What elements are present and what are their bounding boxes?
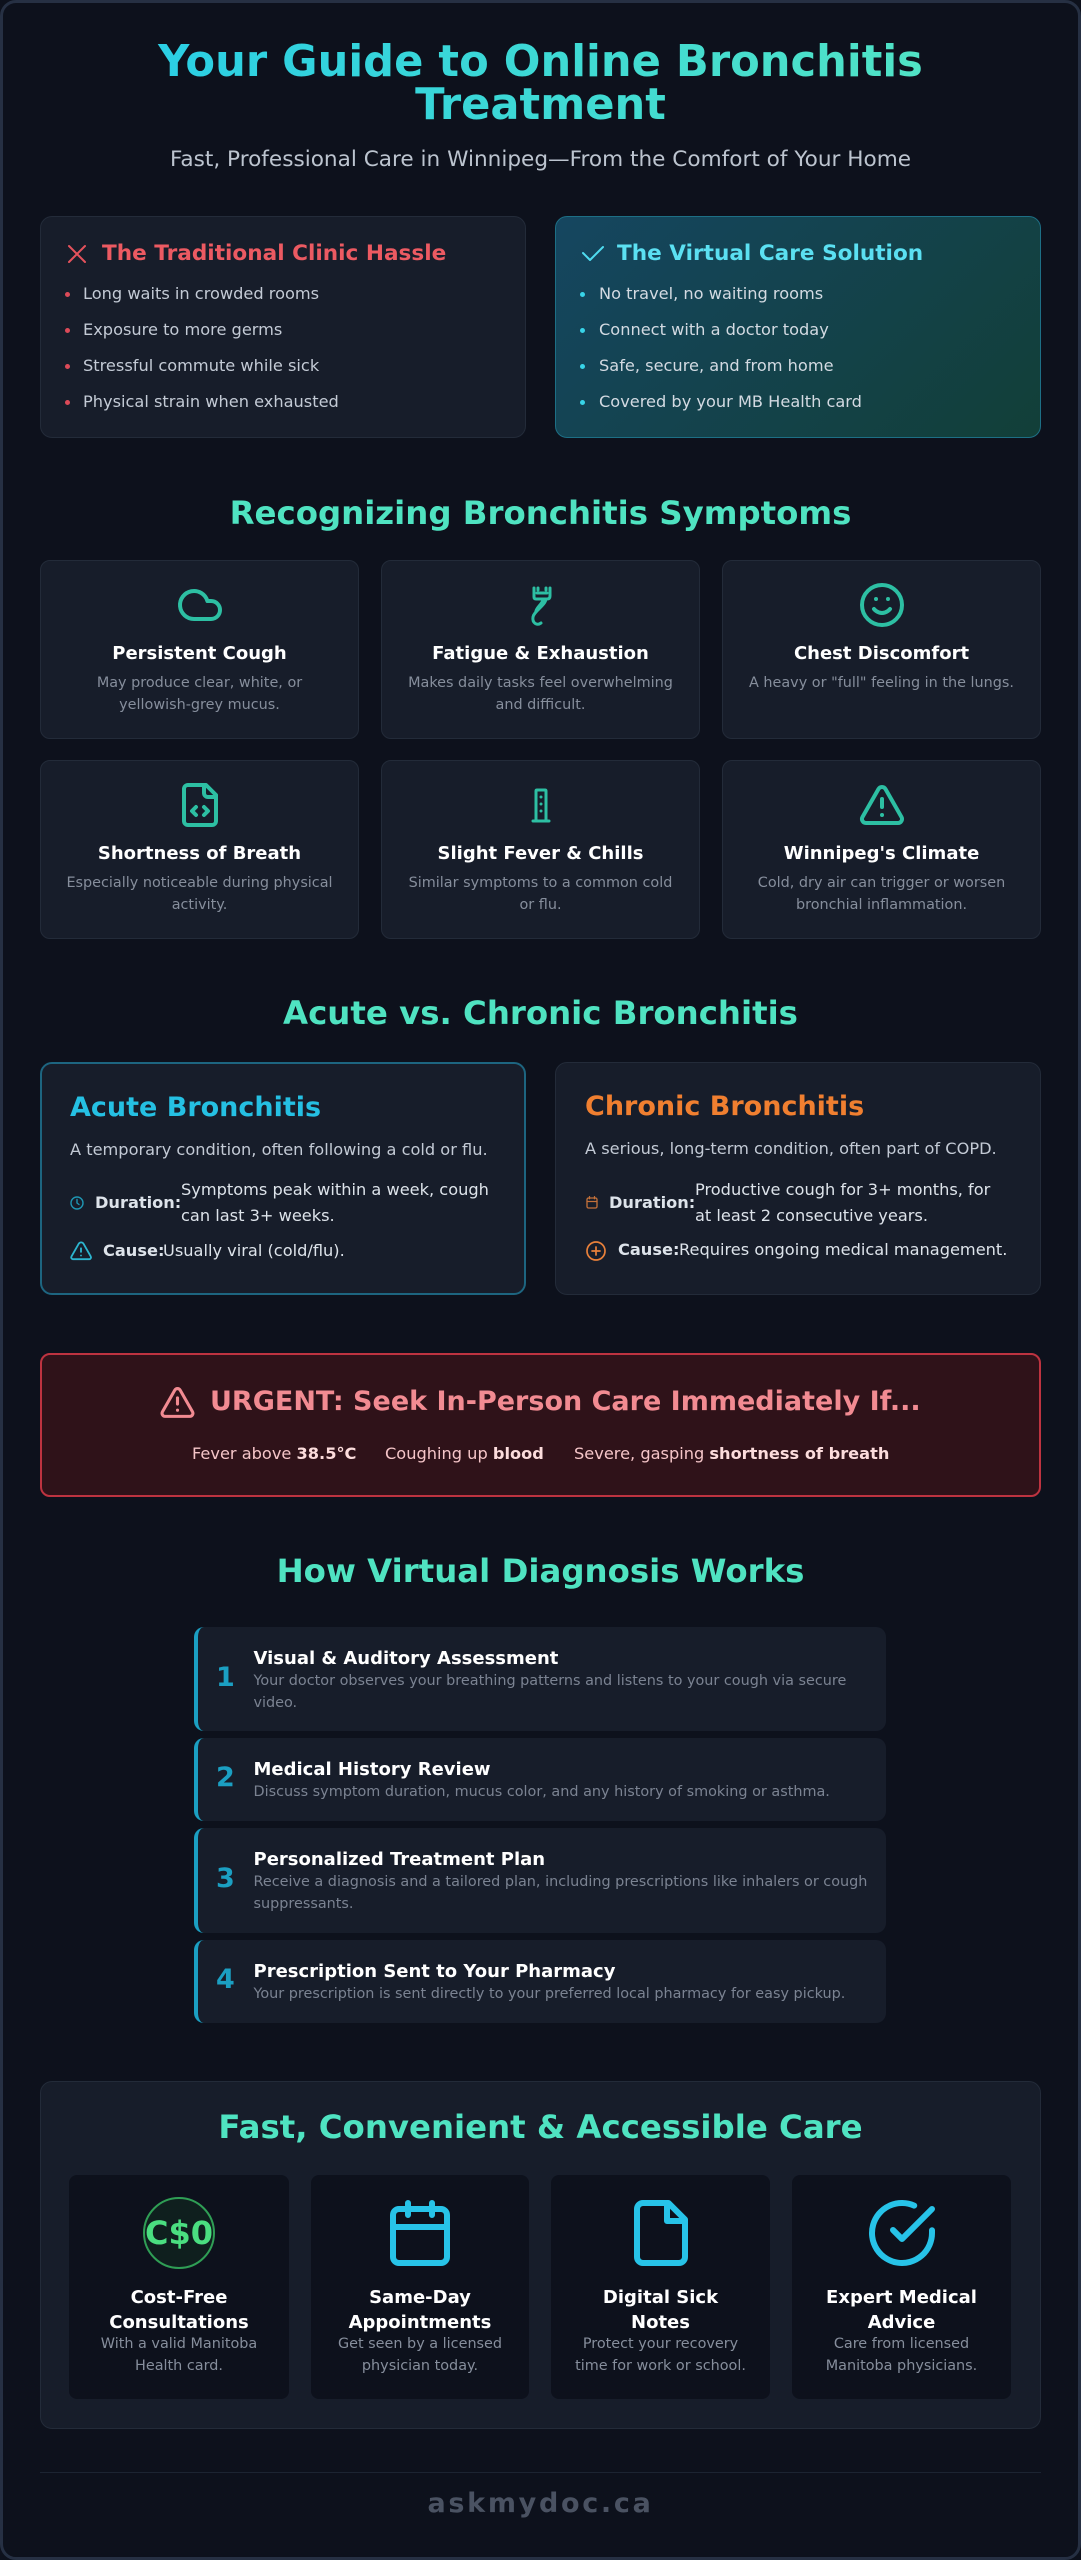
panel: virtual care solution [555,216,1041,438]
card text: Cold, dry air can trigger or worsen [758,875,1005,891]
benefit text: With a valid Manitoba [101,2336,257,2352]
icon: code file [182,783,218,827]
benefit text [101,2336,257,2374]
cause row [70,1241,345,1260]
benefit title: Appointments [349,2312,491,2332]
cause row: Cause: [103,1241,164,1260]
duration row: Duration: [95,1193,181,1212]
step title: Medical History Review [254,1758,491,1780]
urgent items: Severe, gasping shortness of breath [574,1444,889,1463]
duration row: Duration: [609,1193,695,1212]
card text [97,675,302,713]
icon: triangle [70,1242,92,1260]
heading: benefits: Fast, Convenient & Accessible Care [218,2108,863,2146]
card: fever [381,760,700,939]
benefit text [826,2336,977,2374]
card text [408,675,673,713]
benefit title [826,2286,977,2332]
step number: 2 [216,1762,235,1793]
description: A serious, long-term condition, often part of COPD. [585,1139,997,1158]
footer brand: askmydoc.ca [427,2488,654,2519]
card text: or flu. [519,897,562,913]
icon: warning triangle [860,785,904,825]
step number: 1 [216,1662,235,1693]
benefit title [109,2286,249,2332]
step title: Personalized Treatment Plan [254,1848,545,1870]
panel heading: The Virtual Care Solution [617,240,923,266]
card title: Winnipeg's Climate [784,843,979,864]
title: Your Guide to Online Bronchitis [158,36,923,86]
symptom list: Exposure to more germs [83,320,282,339]
card text [758,875,1005,913]
card: persistent cough [40,560,359,739]
duration row: can last 3+ weeks. [181,1206,335,1225]
step title: Visual & Auditory Assessment [254,1648,558,1668]
icon: cloud [178,589,222,621]
benefit text: physician today. [362,2358,478,2374]
heading: symptoms: Recognizing Bronchitis Symptoms [230,494,851,532]
card text: yellowish-grey mucus. [119,697,280,713]
card: chest discomfort [722,560,1041,739]
benefit text [338,2336,502,2374]
benefit title [348,2286,491,2332]
benefit text: Get seen by a licensed [338,2336,502,2352]
icon: C$0 badge: C$0 [145,2214,213,2252]
benefit title: Same-Day [369,2286,471,2308]
panel: traditional clinic hassle [40,216,526,438]
benefit text [575,2336,746,2374]
step text: Discuss symptom duration, mucus color, and any history of smoking or asthma. [254,1784,830,1800]
step number: 3 [216,1863,235,1894]
card text: Especially noticeable during physical [66,875,333,891]
card text: May produce clear, white, or [97,675,302,691]
symptom list [65,284,339,411]
benefit text: Manitoba physicians. [826,2358,977,2374]
step 1 [194,1627,886,1731]
title [0,40,1081,126]
card: fatigue [381,560,700,739]
duration row: Productive cough for 3+ months, for [695,1180,990,1199]
card title: Persistent Cough [112,643,287,664]
card title: Fatigue & Exhaustion [432,643,649,664]
benefit list: Connect with a doctor today [599,320,829,339]
step 2 [194,1738,886,1821]
urgent items [192,1444,889,1463]
description: A temporary condition, often following a cold or flu. [70,1140,488,1159]
benefit title: Expert Medical [826,2286,977,2308]
icon: smile [860,583,904,627]
benefit list: No travel, no waiting rooms [599,284,823,303]
step 3 [194,1828,886,1933]
card text: and difficult. [496,697,585,713]
icon: plus circle [586,1241,606,1261]
card: climate [722,760,1041,939]
panel heading: Chronic Bronchitis [585,1090,864,1122]
card title: Slight Fever & Chills [438,843,643,864]
icon: C$0 badge [143,2197,215,2269]
card text: bronchial inflammation. [796,897,967,913]
benefit title: Notes [631,2312,690,2332]
icon: clock [70,1196,84,1210]
icon: stethoscope [531,586,552,626]
benefit: cost-free [69,2175,289,2399]
benefit title: Digital Sick [603,2286,718,2308]
step text [254,1874,867,1912]
cause row: Cause: [618,1240,679,1259]
card text [409,875,672,913]
benefit list [580,284,862,411]
title: Treatment [415,80,666,130]
benefit: same-day [311,2175,529,2399]
benefit list: Safe, secure, and from home [599,356,834,375]
urgent items: Coughing up blood [385,1444,544,1463]
heading: acute vs chronic: Acute vs. Chronic Bronchitis [283,994,798,1032]
symptom list: Long waits in crowded rooms [83,284,319,303]
icon: check circle [869,2200,935,2266]
benefit list: Covered by your MB Health card [599,392,862,411]
panel heading: The Traditional Clinic Hassle [102,240,446,266]
icon: x mark [68,245,86,263]
benefit title: Consultations [109,2312,249,2332]
duration row: Symptoms peak within a week, cough [181,1180,489,1199]
cause row: Usually viral (cold/flu). [163,1241,345,1260]
step number: 4 [216,1964,235,1995]
cause row: Requires ongoing medical management. [679,1240,1007,1259]
step 4 [194,1940,886,2023]
panel heading: Acute Bronchitis [70,1092,321,1122]
step text: suppressants. [254,1896,354,1912]
benefit title [603,2286,718,2332]
card text: Makes daily tasks feel overwhelming [408,675,673,691]
panel: fast convenient accessible care [40,2081,1041,2429]
step text: Your prescription is sent directly to your preferred local pharmacy for easy pickup. [254,1986,845,2002]
heading: how it works: How Virtual Diagnosis Works [277,1552,804,1590]
icon: warning triangle [160,1387,194,1418]
card title: Chest Discomfort [794,643,969,664]
urgent items: Fever above 38.5°C [192,1444,356,1463]
card title: Shortness of Breath [98,843,301,864]
symptom list: Physical strain when exhausted [83,392,339,411]
subtitle: Fast, Professional Care in Winnipeg—From the Comfort of Your Home [170,146,911,172]
step text [254,1673,846,1711]
icon: check mark [582,246,604,261]
icon: file [634,2200,688,2266]
benefit text: Health card. [135,2358,223,2374]
benefit text: time for work or school. [575,2358,746,2374]
benefit title: Cost-Free [131,2286,227,2308]
symptom list: Stressful commute while sick [83,356,319,375]
card text: activity. [172,897,227,913]
card: shortness of breath [40,760,359,939]
card text [66,875,333,913]
benefit text: Care from licensed [834,2336,969,2352]
benefit: sick notes [551,2175,770,2399]
panel: acute bronchitis [40,1062,526,1295]
duration row: at least 2 consecutive years. [695,1206,928,1225]
step title: Prescription Sent to Your Pharmacy [254,1960,615,1982]
step text: Receive a diagnosis and a tailored plan, including prescriptions like inhalers or cough [254,1874,867,1890]
card text: A heavy or "full" feeling in the lungs. [749,675,1014,691]
urgent callout [40,1353,1041,1497]
icon: tower [532,788,550,822]
duration row [586,1180,990,1225]
icon: calendar [390,2200,450,2266]
duration row [70,1180,489,1225]
step text: Your doctor observes your breathing patterns and listens to your cough via secure [254,1673,846,1689]
benefit: expert advice [792,2175,1011,2399]
step text: video. [254,1695,297,1711]
card text: Similar symptoms to a common cold [409,875,672,891]
panel: chronic bronchitis [555,1062,1041,1295]
benefit title: Advice [868,2312,935,2332]
urgent heading: URGENT: Seek In-Person Care Immediately If... [210,1386,921,1416]
icon: calendar [586,1196,598,1209]
benefit text: Protect your recovery [583,2336,738,2352]
